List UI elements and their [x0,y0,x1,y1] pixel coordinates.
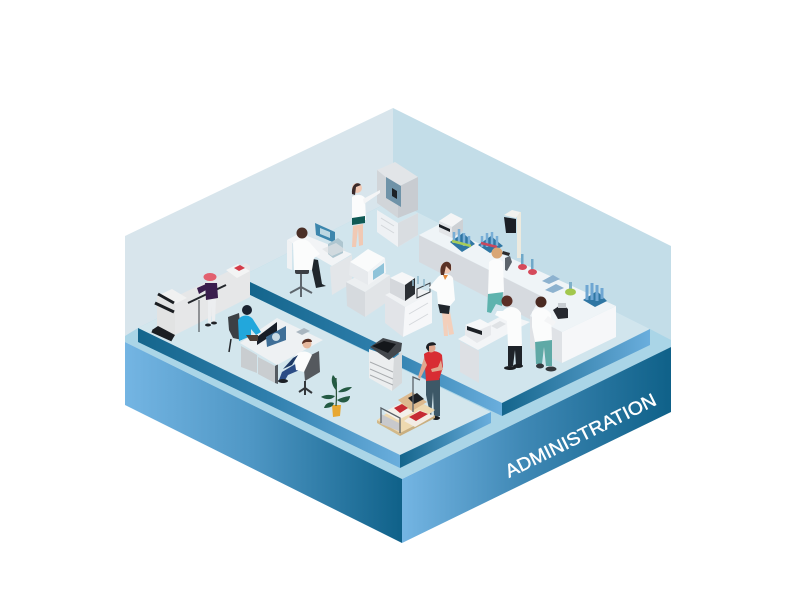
microscope lamp stand [504,210,521,258]
seated lab technician [290,228,326,297]
small side desk with printer [458,314,530,383]
delivery cart with parcels [377,377,435,436]
potted plant [321,375,352,417]
analysis desk with monitor [287,223,352,295]
scientist with black trousers [495,296,523,370]
woman in lab coat [429,262,455,336]
test tube racks [450,229,607,307]
left glass wall [125,108,393,336]
office worker in white coat with chair [278,339,320,395]
office worker in blue [228,305,261,352]
upper cabinet with control panel [377,162,418,247]
scientist at bench rear [487,248,512,313]
base block [125,190,671,543]
bench printer [439,213,463,238]
laboratory floor platform [250,200,650,416]
multifunction printer [369,338,402,391]
production printer row [152,263,250,340]
delivery person in red shirt [418,342,443,420]
office desk with monitors [240,318,323,384]
long laboratory bench [419,225,616,363]
administration label: ADMINISTRATION [501,389,659,482]
scientist with teal trousers [532,296,556,372]
scientist at cabinet [352,183,380,247]
right glass wall [393,108,671,340]
office floor platform [138,272,491,468]
microscope on peninsula [553,303,568,319]
operator at printer [197,273,218,326]
instrument on drawer unit [385,272,432,337]
centre instrument on bench [346,249,390,317]
red flasks and papers [518,254,576,296]
